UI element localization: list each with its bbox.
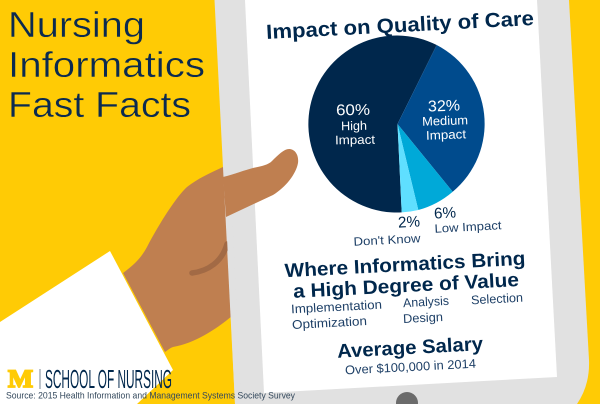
label: medium impact bbox=[422, 97, 468, 143]
text: SCHOOL OF NURSING bbox=[45, 364, 172, 394]
white coat sleeve bbox=[0, 251, 173, 404]
pie chart bbox=[308, 36, 485, 213]
value list: Implementation bbox=[291, 298, 382, 316]
label: low impact: 6% bbox=[434, 204, 457, 223]
title: Nursing bbox=[8, 4, 145, 45]
hand crease bbox=[192, 244, 227, 273]
value list: Selection bbox=[471, 291, 523, 307]
logo divider bbox=[40, 369, 41, 389]
label: don't know: Don't Know bbox=[353, 231, 421, 249]
source note: Source: 2015 Health Information and Management Systems Society Survey bbox=[6, 390, 295, 402]
label: high impact: High bbox=[341, 119, 367, 133]
chart heading: Impact on Quality of Care bbox=[266, 7, 534, 44]
heading: where informatics bring value: Where Informatics Bring bbox=[284, 248, 526, 282]
hand behind tablet bbox=[123, 166, 232, 352]
label: medium impact: 32% bbox=[428, 97, 461, 116]
heading: average salary: Average Salary bbox=[337, 333, 484, 363]
tablet bbox=[214, 0, 589, 404]
logo mark: M bbox=[8, 366, 33, 393]
tablet frame bbox=[214, 0, 589, 404]
label: high impact bbox=[335, 102, 376, 147]
label: low impact bbox=[434, 204, 503, 236]
label: low impact: Low Impact bbox=[434, 218, 503, 236]
label: high impact: Impact bbox=[335, 133, 376, 147]
label: high impact: 60% bbox=[336, 102, 370, 119]
salary value: Over $100,000 in 2014 bbox=[345, 357, 476, 377]
logo bbox=[8, 364, 172, 394]
tablet screen bbox=[245, 0, 557, 393]
label: medium impact: Medium bbox=[422, 113, 468, 129]
home button bbox=[396, 392, 418, 404]
value list: Design bbox=[403, 310, 443, 326]
slice: medium impact bbox=[398, 45, 485, 192]
slice: low impact bbox=[398, 124, 453, 210]
title bbox=[8, 4, 205, 125]
heading: where informatics bring value: a High Degree of Value bbox=[293, 269, 520, 303]
value list bbox=[291, 291, 523, 332]
value list: Optimization bbox=[292, 314, 367, 332]
label: don't know bbox=[353, 213, 421, 249]
heading: where informatics bring value bbox=[284, 248, 526, 303]
label: don't know: 2% bbox=[398, 213, 421, 232]
title: Fast Facts bbox=[8, 84, 191, 125]
label: medium impact: Impact bbox=[426, 127, 467, 143]
thumb bbox=[223, 149, 298, 217]
value list: Analysis bbox=[403, 294, 449, 310]
slice: high impact bbox=[308, 36, 437, 213]
tablet edge over crease bbox=[226, 215, 241, 404]
title: Informatics bbox=[8, 44, 205, 85]
slice: don't know bbox=[398, 124, 418, 212]
